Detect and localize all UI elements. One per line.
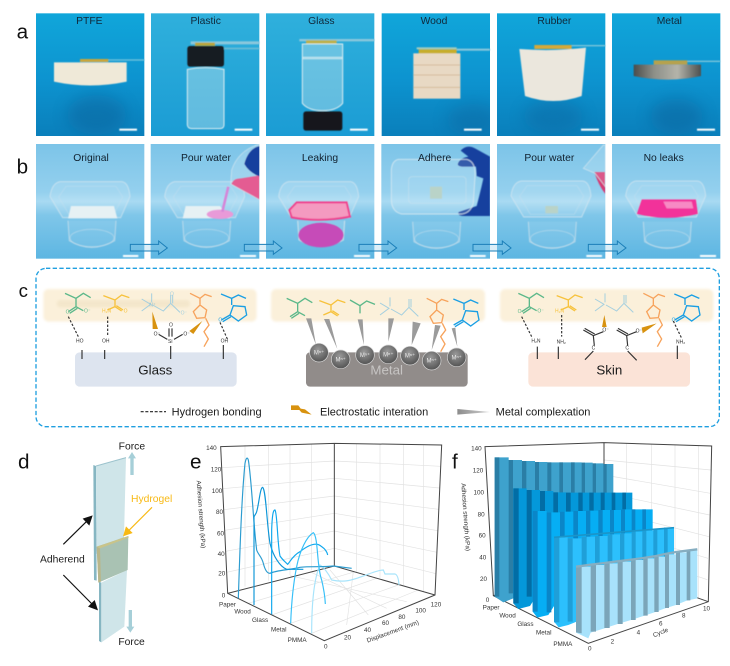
group labels: C: [592, 346, 596, 352]
arrow: step 4: [473, 241, 511, 254]
group labels: O⁻: [154, 332, 161, 338]
photo: Original: [36, 144, 144, 259]
curve: paper: [238, 458, 352, 598]
category labels: [483, 604, 573, 648]
photo: Wood: Wood: [421, 16, 448, 27]
dashed frame: [36, 268, 719, 427]
photo: Leaking: Leaking: [302, 153, 338, 164]
ion labels: Mⁿ⁺: [426, 358, 437, 365]
photo: Wood: [382, 13, 500, 137]
ion labels: Mⁿ⁺: [383, 351, 394, 358]
label: force bottom: Force: [118, 637, 145, 648]
y axis tick labels: 40: [218, 551, 225, 558]
y axis tick labels: 100: [212, 488, 223, 495]
curve: wood: [254, 487, 303, 605]
y axis tick labels: 60: [217, 530, 224, 537]
y axis tick labels: [471, 445, 490, 604]
x axis title: Displacement (mm): [366, 619, 420, 645]
group labels: Si: [168, 339, 172, 345]
label: hydrogel: Hydrogel: [131, 494, 172, 505]
panel f: cycle stability 3D bars: [452, 443, 712, 652]
group labels: O⁻: [636, 328, 643, 334]
panel letter a: a: [17, 20, 29, 43]
bars: paper: [495, 457, 613, 602]
legend: electrostatic interaction: Electrostatic interation: [320, 406, 428, 418]
y axis tick labels: 20: [218, 571, 226, 578]
y axis tick labels: 60: [479, 533, 486, 540]
group labels: NH₂: [557, 340, 566, 346]
y axis tick labels: 0: [486, 597, 490, 604]
cycle tick labels: 6: [659, 620, 663, 627]
panel letter e: e: [190, 450, 202, 473]
upper adherend: [93, 458, 126, 581]
ion labels: Mⁿ⁺: [360, 352, 370, 359]
ion labels: [314, 350, 462, 365]
category labels: Metal: [536, 629, 551, 636]
force arrow up: [128, 452, 136, 475]
polymer chains: O: [170, 292, 174, 298]
substrate label: Glass: [138, 362, 173, 377]
label: force top: Force: [119, 441, 145, 452]
arrow: step 5: [588, 241, 626, 254]
arrow: hydrogel: [123, 507, 152, 536]
panel e: adhesion curves 3D chart: [190, 443, 442, 650]
substrate: skin: [528, 352, 690, 387]
hydrogel film: [43, 289, 257, 322]
displacement tick labels: 0: [324, 643, 328, 650]
displacement tick labels: 80: [398, 614, 406, 621]
photo: Adhere: Adhere: [418, 153, 452, 164]
photo: Leaking: [266, 144, 374, 259]
polymer chains: H₂N: [555, 308, 565, 314]
polymer chains: N⁺: [149, 303, 156, 309]
polymer chains: O: [672, 318, 676, 324]
curve: metal: [291, 533, 325, 623]
y axis tick labels: 80: [216, 509, 223, 516]
substrate label: Skin: [596, 362, 622, 377]
bars: wood: [513, 488, 632, 609]
category labels: Wood: [234, 609, 251, 616]
group labels: O⁻: [183, 332, 190, 338]
ion labels: Mⁿ⁺: [314, 350, 324, 357]
y axis tick labels: 0: [222, 593, 226, 600]
legend: hydrogen bonding: Hydrogen bonding: [172, 406, 262, 418]
mechanism: skin: [500, 289, 713, 387]
arrow: adherend lower: [63, 575, 98, 610]
ion labels: Mⁿ⁺: [335, 356, 346, 363]
mechanism: metal: [271, 289, 485, 387]
group labels: OH: [221, 339, 229, 345]
panel letter d: d: [18, 450, 30, 473]
mechanism: glass: [43, 289, 257, 387]
group labels: O⁻: [602, 327, 609, 333]
panel letter f: f: [452, 450, 458, 473]
chart grid: [222, 444, 441, 633]
panel d: lap shear schematic: [18, 441, 172, 648]
cycle tick labels: 10: [703, 605, 711, 612]
y axis tick labels: [206, 445, 226, 600]
photo: PTFE: [36, 13, 144, 136]
photo: Rubber: Rubber: [537, 16, 572, 27]
group labels: [531, 327, 685, 352]
category labels: Glass: [517, 621, 534, 628]
category labels: [219, 602, 307, 644]
photo: Glass: [266, 13, 374, 136]
ion labels: Mⁿ⁺: [405, 353, 415, 360]
hydrogel layer: [97, 536, 129, 583]
bars: PMMA: [576, 549, 697, 638]
displacement tick labels: [324, 602, 442, 650]
electrostatic wedges: [602, 315, 657, 333]
photo: No leaks: [612, 144, 720, 259]
bars: metal: [554, 528, 674, 627]
photo: No leaks: No leaks: [644, 153, 684, 164]
polymer chains: [287, 297, 479, 352]
panel b: leak test photos: [36, 144, 720, 259]
photo: Pour water, repaired: [497, 144, 605, 259]
surface groups: [82, 328, 223, 359]
curve: glass: [272, 510, 328, 614]
panel c: adhesion mechanism: [19, 268, 719, 427]
polymer chains: O⁻: [181, 310, 188, 316]
arrow: adherend upper: [63, 515, 93, 544]
y axis tick labels: 120: [211, 466, 222, 473]
polymer chains: H₂N: [102, 308, 112, 314]
lower adherend: [99, 570, 127, 642]
chart grid: [604, 444, 711, 598]
polymer chains: O⁻: [84, 309, 91, 315]
photo: Pour water: Pour water: [181, 153, 232, 164]
category labels: Wood: [499, 612, 516, 619]
photo: Original: Original: [73, 153, 109, 164]
y axis tick labels: 20: [480, 576, 487, 583]
displacement tick labels: 100: [415, 608, 426, 615]
photo: Pour water: [151, 144, 260, 259]
polymer chains: O: [66, 309, 70, 315]
substrate: metal: [306, 352, 468, 387]
bars: glass: [533, 509, 653, 618]
photo: Plastic: Plastic: [190, 16, 221, 27]
y axis title: Adhesion strength (kPa): [459, 483, 471, 551]
cycle tick labels: [588, 605, 711, 652]
group labels: HO: [76, 339, 84, 345]
chart frame: [485, 443, 712, 643]
surface groups: [537, 328, 677, 360]
photo: Rubber: [497, 13, 605, 136]
y axis tick labels: 140: [471, 445, 482, 452]
hydrogen bonds: [68, 317, 227, 339]
label: adherend: Adherend: [40, 555, 85, 566]
group labels: NH₂: [676, 340, 685, 346]
chart frame: [221, 443, 442, 641]
y axis tick labels: 100: [473, 489, 484, 496]
panel letter b: b: [17, 155, 28, 178]
polymer chains: [65, 292, 247, 347]
curve: PMMA: [312, 565, 399, 633]
photo: Pour water, repaired: Pour water: [524, 153, 575, 164]
photo: Glass: Glass: [308, 16, 335, 27]
cycle tick labels: 2: [611, 639, 615, 646]
metal ions: [310, 343, 466, 370]
category labels: Metal: [271, 626, 286, 633]
x axis title: Cycle: [652, 627, 670, 639]
y axis title: Adhesion strength (kPa): [195, 480, 206, 549]
force arrow down: [126, 610, 134, 633]
cycle tick labels: 8: [682, 612, 686, 619]
photo: PTFE: PTFE: [76, 16, 103, 27]
photo: Metal: Metal: [657, 16, 682, 27]
displacement tick labels: 60: [382, 620, 390, 627]
category labels: PMMA: [553, 641, 573, 648]
polymer chains: O: [218, 318, 222, 324]
displacement tick labels: 120: [431, 602, 442, 609]
y axis tick labels: 80: [478, 511, 485, 518]
group labels: OH: [102, 339, 110, 345]
polymer chains: O⁻: [537, 309, 544, 315]
ion labels: Mⁿ⁺: [451, 354, 462, 361]
y axis tick labels: 140: [206, 445, 217, 452]
hydrogel film: [500, 289, 713, 322]
photo: Metal: [612, 13, 720, 136]
metal complexation wedges: [306, 318, 457, 350]
cycle tick labels: 0: [588, 645, 592, 652]
arrow: step 2: [244, 241, 282, 254]
photo: Adhere: [381, 144, 490, 259]
polymer chains: [518, 293, 700, 347]
group labels: C: [625, 346, 629, 352]
group labels: O: [169, 323, 173, 329]
polymer chains: O: [518, 309, 522, 315]
hydrogen bonds: [522, 315, 682, 338]
photo: Plastic: [151, 13, 259, 136]
substrate: glass: [75, 352, 237, 387]
displacement tick labels: 20: [344, 635, 352, 642]
substrate label: Metal: [370, 362, 403, 377]
cycle tick labels: 4: [637, 630, 641, 637]
category labels: Glass: [252, 617, 268, 624]
displacement tick labels: 40: [364, 627, 372, 634]
y axis tick labels: 120: [473, 468, 484, 475]
category labels: PMMA: [288, 637, 307, 644]
electrostatic wedges: [152, 312, 202, 334]
polymer chains: O: [124, 309, 128, 315]
arrow: step 3: [359, 241, 397, 254]
hydrogel film: [271, 289, 485, 322]
group labels: H₂N: [531, 339, 541, 345]
arrow: step 1: [130, 241, 167, 254]
group labels: [76, 323, 229, 345]
legend: metal complexation: Metal complexation: [496, 406, 590, 418]
panel a: substrate photos: [36, 13, 720, 137]
y axis tick labels: 40: [479, 555, 487, 562]
panel letter c: c: [19, 280, 28, 301]
category labels: Paper: [483, 604, 500, 611]
category labels: Paper: [219, 602, 236, 609]
